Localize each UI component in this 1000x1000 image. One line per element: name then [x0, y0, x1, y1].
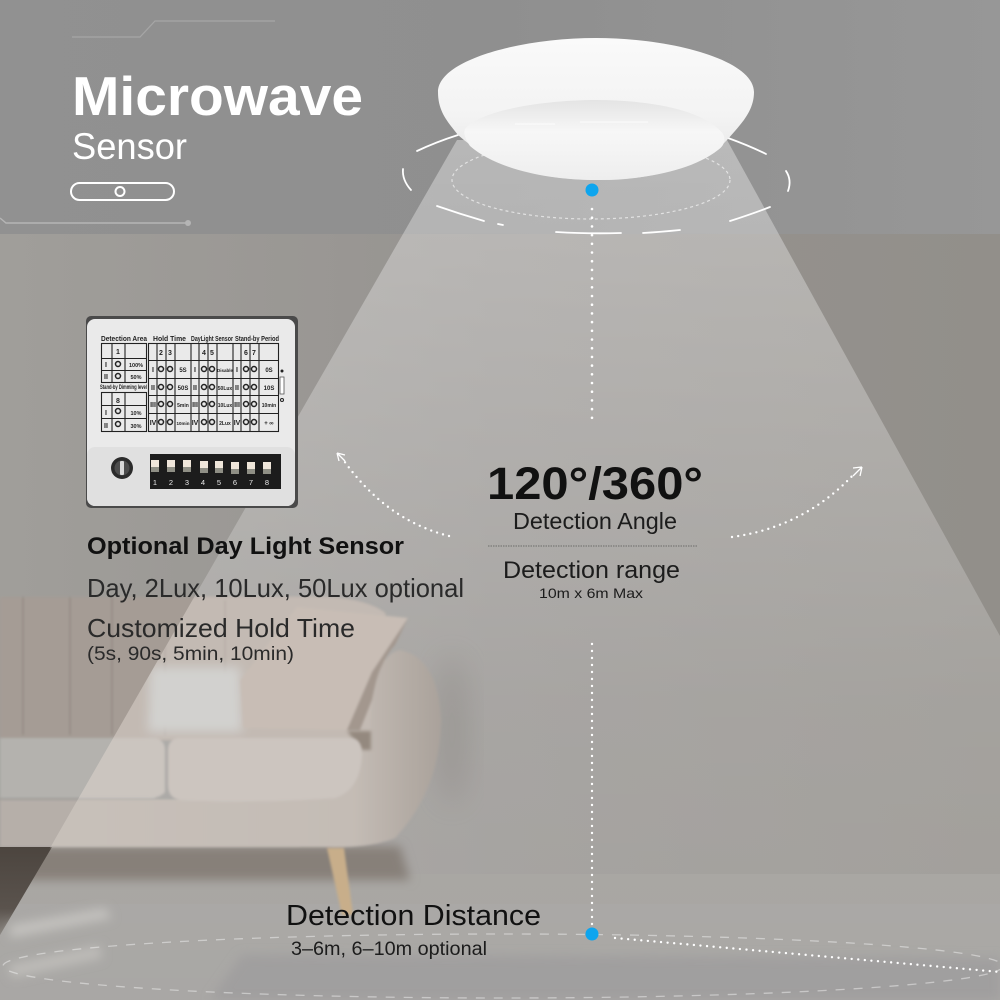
table values: I: [105, 410, 107, 417]
DIP switch block: 5: [217, 478, 221, 487]
right angle arrow: [732, 467, 862, 537]
title block: [0, 21, 363, 226]
table values: 50%: [130, 375, 142, 381]
table values: III: [234, 402, 240, 409]
text block: detection distance: [286, 900, 541, 960]
table values: Disable: [217, 368, 233, 373]
table values: 0S: [265, 368, 273, 374]
angle label: Detection Angle: [513, 508, 677, 534]
table values: 5min: [177, 403, 189, 409]
floor dotted radius: [615, 938, 1000, 972]
table values: 50S: [178, 386, 188, 392]
table values: II: [104, 374, 108, 381]
dark corner outside the cone: [0, 847, 52, 935]
bottom blue dot: [586, 928, 598, 940]
table switch circles: [116, 362, 256, 426]
text block: detection angle and range: [487, 458, 703, 601]
DIP switch block: 2: [169, 478, 173, 487]
table values: III: [192, 402, 198, 409]
table values: II: [104, 423, 108, 430]
table values: 5: [210, 350, 214, 357]
table values: II: [193, 385, 197, 392]
hold time values: (5s, 90s, 5min, 10min): [87, 644, 294, 665]
table values: II: [151, 385, 155, 392]
table values: I: [105, 362, 107, 369]
table values: 6: [244, 350, 248, 357]
DIP switch block: 7: [249, 478, 253, 487]
angle value: 120°/360°: [487, 458, 703, 509]
floor dashed ellipse: [3, 934, 1000, 998]
vertical dotted line lower: [591, 644, 593, 925]
table values: 2: [159, 350, 163, 357]
DIP switch block: 1: [153, 478, 157, 487]
table headings: Hold Time: [153, 334, 186, 343]
divider: [488, 545, 698, 547]
table values: 50Lux: [218, 386, 232, 392]
detection ring: solid arcs: [403, 135, 790, 233]
table values: 10Lux: [218, 403, 232, 409]
table headings: Stand-by Period: [235, 334, 279, 343]
table headings: DayLight Sensor: [191, 334, 233, 343]
under-sofa shadow: [0, 846, 410, 880]
subtitle: Sensor: Sensor: [72, 126, 187, 167]
top blue dot: [586, 184, 598, 196]
ceiling lamp: [438, 38, 754, 180]
table values: 10%: [130, 411, 142, 417]
table values: [104, 349, 276, 430]
sofa, lit part: [50, 596, 440, 916]
sensor pill icon: [71, 183, 174, 200]
DIP switch block: 3: [185, 478, 189, 487]
table values: IV: [192, 420, 199, 427]
DIP switch block: 4: [201, 478, 205, 487]
table values: 10S: [264, 386, 274, 392]
table values: IV: [234, 420, 241, 427]
table grid: [102, 344, 278, 432]
range value: 10m x 6m Max: [539, 585, 643, 601]
decorative circuit line bottom: [0, 218, 191, 226]
sensor control panel photo: [86, 316, 298, 508]
text block: daylight sensor: [87, 533, 464, 665]
table values: 4: [202, 350, 206, 357]
sofa, unlit part: [0, 597, 385, 847]
table values: I: [194, 367, 196, 374]
table values: 10min: [176, 421, 190, 426]
title: Microwave: Microwave: [72, 65, 363, 127]
table values: 8: [116, 398, 120, 405]
DIP switch block: [150, 454, 281, 489]
table values: 2Lux: [219, 421, 231, 427]
range label: Detection range: [503, 557, 680, 584]
table values: 5S: [179, 368, 187, 374]
decorative circuit line top: [72, 21, 275, 37]
wall shadow behind sofa arm: [436, 655, 468, 805]
DIP switch block: 8: [265, 478, 269, 487]
table values: 1: [116, 349, 120, 356]
table values: IV: [150, 420, 157, 427]
table headings: Stand-by Dimming level: [100, 385, 147, 391]
table values: 7: [252, 350, 256, 357]
table values: II: [235, 385, 239, 392]
table values: 30%: [130, 424, 142, 430]
table values: I: [152, 367, 154, 374]
lux options: Day, 2Lux, 10Lux, 50Lux optional: [87, 573, 464, 603]
table headings: [100, 334, 279, 391]
table values: 3: [168, 350, 172, 357]
heading: Optional Day Light Sensor: [87, 533, 404, 560]
adjust knob: [111, 457, 133, 479]
table values: 100%: [129, 363, 143, 369]
distance label: Detection Distance: [286, 900, 541, 932]
side indicator: [280, 370, 284, 402]
distance value: 3–6m, 6–10m optional: [291, 939, 487, 960]
left angle arrow: [337, 453, 449, 536]
hold time: Customized Hold Time: [87, 613, 355, 643]
table values: III: [150, 402, 156, 409]
DIP switch block: 6: [233, 478, 237, 487]
table values: I: [236, 367, 238, 374]
table values: 10min: [262, 403, 276, 409]
vertical dotted line upper: [591, 209, 593, 426]
floor reflections and rug: [8, 908, 1000, 1000]
table values: + ∞: [264, 421, 274, 427]
table headings: Detection Area: [101, 334, 148, 343]
detection ring: inner dashed ellipse: [452, 141, 730, 219]
